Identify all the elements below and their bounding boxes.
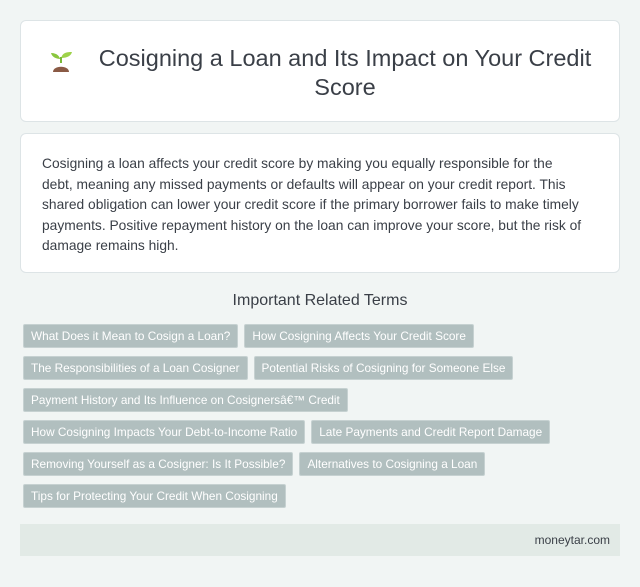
text block: Cosigning a loan affects your credit score by making you equally responsible for the debt, meaning any missed payments or defaults will appear on your credit report. This shared obligation can lower your credit score if the primary borrower fails to make timely payments. Positive repayment history on the loan can improve your score, but the risk of damage remains high.	[42, 156, 581, 253]
icon: seedling	[51, 52, 72, 72]
tags: Removing Yourself as a Cosigner: Is It Possible?	[31, 457, 285, 471]
tags: How Cosigning Affects Your Credit Score	[252, 329, 466, 343]
tags: Alternatives to Cosigning a Loan	[307, 457, 477, 471]
tags: Tips for Protecting Your Credit When Cosigning	[31, 489, 278, 503]
tags: Late Payments and Credit Report Damage	[319, 425, 542, 439]
panel: description	[20, 133, 620, 273]
tags	[23, 324, 550, 508]
tags: Potential Risks of Cosigning for Someone Else	[262, 361, 505, 375]
heading: related terms: Important Related Terms	[233, 292, 407, 309]
tags: How Cosigning Impacts Your Debt-to-Income Ratio	[31, 425, 297, 439]
heading: Cosigning a Loan and Its Impact on Your Credit Score	[99, 45, 591, 100]
tags: What Does it Mean to Cosign a Loan?	[31, 329, 230, 343]
footer	[20, 524, 620, 556]
tags: The Responsibilities of a Loan Cosigner	[31, 361, 240, 375]
panel: title	[20, 20, 620, 122]
tags: Payment History and Its Influence on Cosignersâ€™ Credit	[31, 393, 340, 407]
footer text: moneytar.com	[535, 533, 610, 547]
